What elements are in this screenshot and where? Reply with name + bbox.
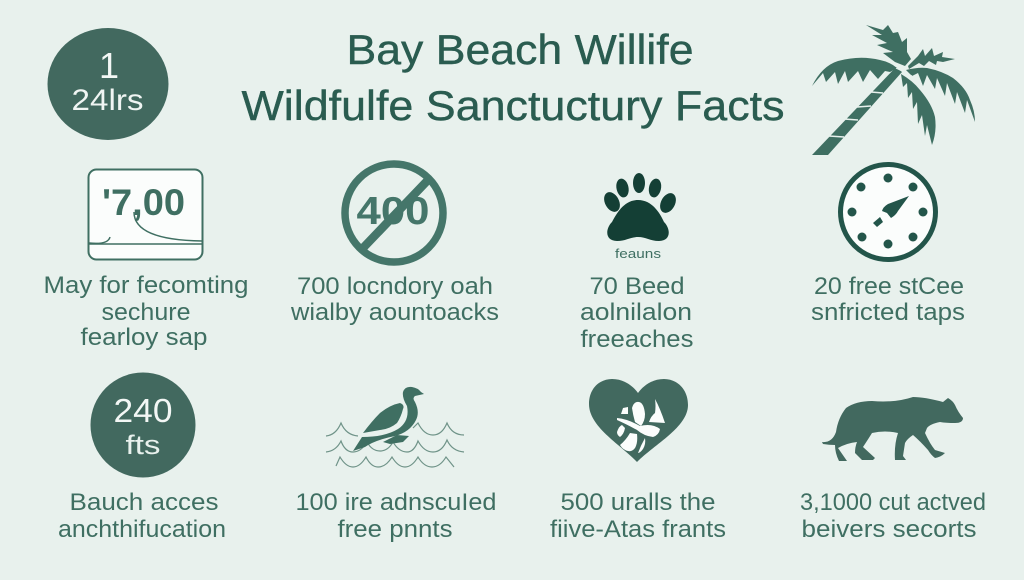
badge: 240 fts: fts <box>126 430 160 460</box>
caption: column 1 row 2 <box>58 489 226 543</box>
icon: paw print <box>601 173 679 261</box>
icon: prohibited 400: 400 <box>356 190 430 233</box>
caption: column 1 row 1: sechure <box>102 299 190 326</box>
icon: compass dial <box>840 164 936 260</box>
caption: column 4 row 1: 20 free stCee <box>814 273 964 300</box>
caption: column 3 row 1 <box>580 273 694 353</box>
caption: column 2 row 1: 700 locndory oah <box>297 273 493 300</box>
icon card: 700: '7,00 <box>102 182 185 223</box>
caption: column 1 row 1: fearloy sap <box>80 324 208 351</box>
caption: column 3 row 2: fiive-Atas frants <box>550 516 726 543</box>
caption: column 2 row 1: wialby aountoacks <box>290 299 499 326</box>
caption: column 4 row 1 <box>811 273 965 326</box>
badge: 240 fts: 240 <box>114 392 172 429</box>
caption: column 4 row 1: snfricted taps <box>811 299 965 326</box>
caption: column 3 row 2 <box>550 489 726 543</box>
icon: bird on waves <box>326 387 464 467</box>
caption: column 1 row 2: anchthifucation <box>58 516 226 543</box>
caption: column 4 row 2: 3,1000 cut actved <box>800 489 986 516</box>
badge: 24 hours: 24lrs <box>72 84 144 117</box>
icon: paw print: feauns <box>615 246 662 261</box>
badge: 240 fts <box>90 372 196 478</box>
badge: 24 hours: 1 <box>99 45 119 86</box>
caption: column 3 row 2: 500 uralls the <box>560 489 716 516</box>
caption: column 2 row 2: 100 ire adnscuIed <box>296 489 496 516</box>
caption: column 2 row 1 <box>290 273 499 326</box>
title <box>242 26 784 129</box>
title: Wildfulfe Sanctuctury Facts <box>242 82 784 129</box>
icon card: 700 <box>88 170 202 260</box>
icon: wild animal silhouette <box>822 397 963 461</box>
icon: prohibited 400 <box>345 164 443 262</box>
badge: 24 hours <box>48 28 168 140</box>
caption: column 1 row 2: Bauch acces <box>70 489 218 516</box>
caption: column 3 row 1: freeaches <box>580 326 694 353</box>
caption: column 1 row 1: May for fecomting <box>44 272 248 299</box>
caption: column 4 row 2 <box>800 489 986 543</box>
caption: column 3 row 1: 70 Beed <box>590 273 684 300</box>
icon: heart with animal shapes <box>589 379 688 462</box>
caption: column 3 row 1: aolnilalon <box>580 299 692 326</box>
caption: column 1 row 1 <box>44 272 248 351</box>
caption: column 2 row 2: free pnnts <box>338 516 452 543</box>
caption: column 2 row 2 <box>296 489 496 543</box>
caption: column 4 row 2: beivers secorts <box>802 516 976 543</box>
title: Bay Beach Willife <box>346 26 694 73</box>
icon: palm tree <box>812 25 975 155</box>
